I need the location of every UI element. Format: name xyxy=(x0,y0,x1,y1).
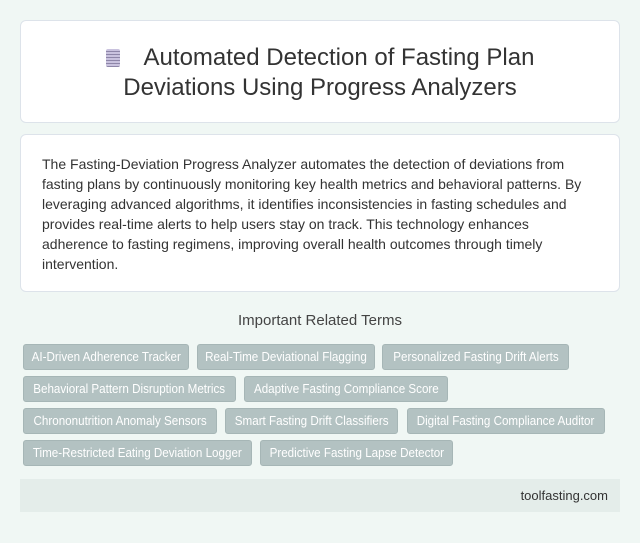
footer text: toolfasting.com xyxy=(521,488,608,503)
tag: Smart Fasting Drift Classifiers xyxy=(235,414,388,428)
tag: Chrononutrition Anomaly Sensors xyxy=(33,414,207,428)
tag xyxy=(407,408,605,434)
title xyxy=(106,44,534,101)
tag xyxy=(23,376,236,402)
tag: Predictive Fasting Lapse Detector xyxy=(269,446,444,460)
section heading: Important Related Terms xyxy=(238,312,402,329)
icon: document xyxy=(106,49,120,67)
description card xyxy=(20,134,620,292)
tag: Real-Time Deviational Flagging xyxy=(205,350,367,364)
tag xyxy=(382,344,569,370)
title: Automated Detection of Fasting Plan xyxy=(144,44,534,71)
footer xyxy=(20,479,620,512)
tag xyxy=(23,408,217,434)
description text: The Fasting-Deviation Progress Analyzer automates the detection of deviations from fasting plans by continuously monitoring key health metrics and behavioral patterns. By leveraging advanced algorithms, it identifies inconsistencies in fasting schedules and provides real-time alerts to help users stay on track. This technology enhances adherence to fasting regimens, improving overall health outcomes through timely intervention. xyxy=(42,156,581,272)
tag xyxy=(260,440,453,466)
tag xyxy=(197,344,375,370)
tag: Time-Restricted Eating Deviation Logger xyxy=(33,446,242,460)
tag: Behavioral Pattern Disruption Metrics xyxy=(34,382,225,396)
header card xyxy=(20,20,620,123)
tag: Personalized Fasting Drift Alerts xyxy=(393,350,558,364)
tag: Digital Fasting Compliance Auditor xyxy=(417,414,595,428)
tag xyxy=(225,408,398,434)
tag xyxy=(23,440,252,466)
title: Deviations Using Progress Analyzers xyxy=(123,74,517,101)
tag: AI-Driven Adherence Tracker xyxy=(31,350,181,364)
tag: Adaptive Fasting Compliance Score xyxy=(254,382,438,396)
tag xyxy=(244,376,448,402)
tag xyxy=(23,344,189,370)
